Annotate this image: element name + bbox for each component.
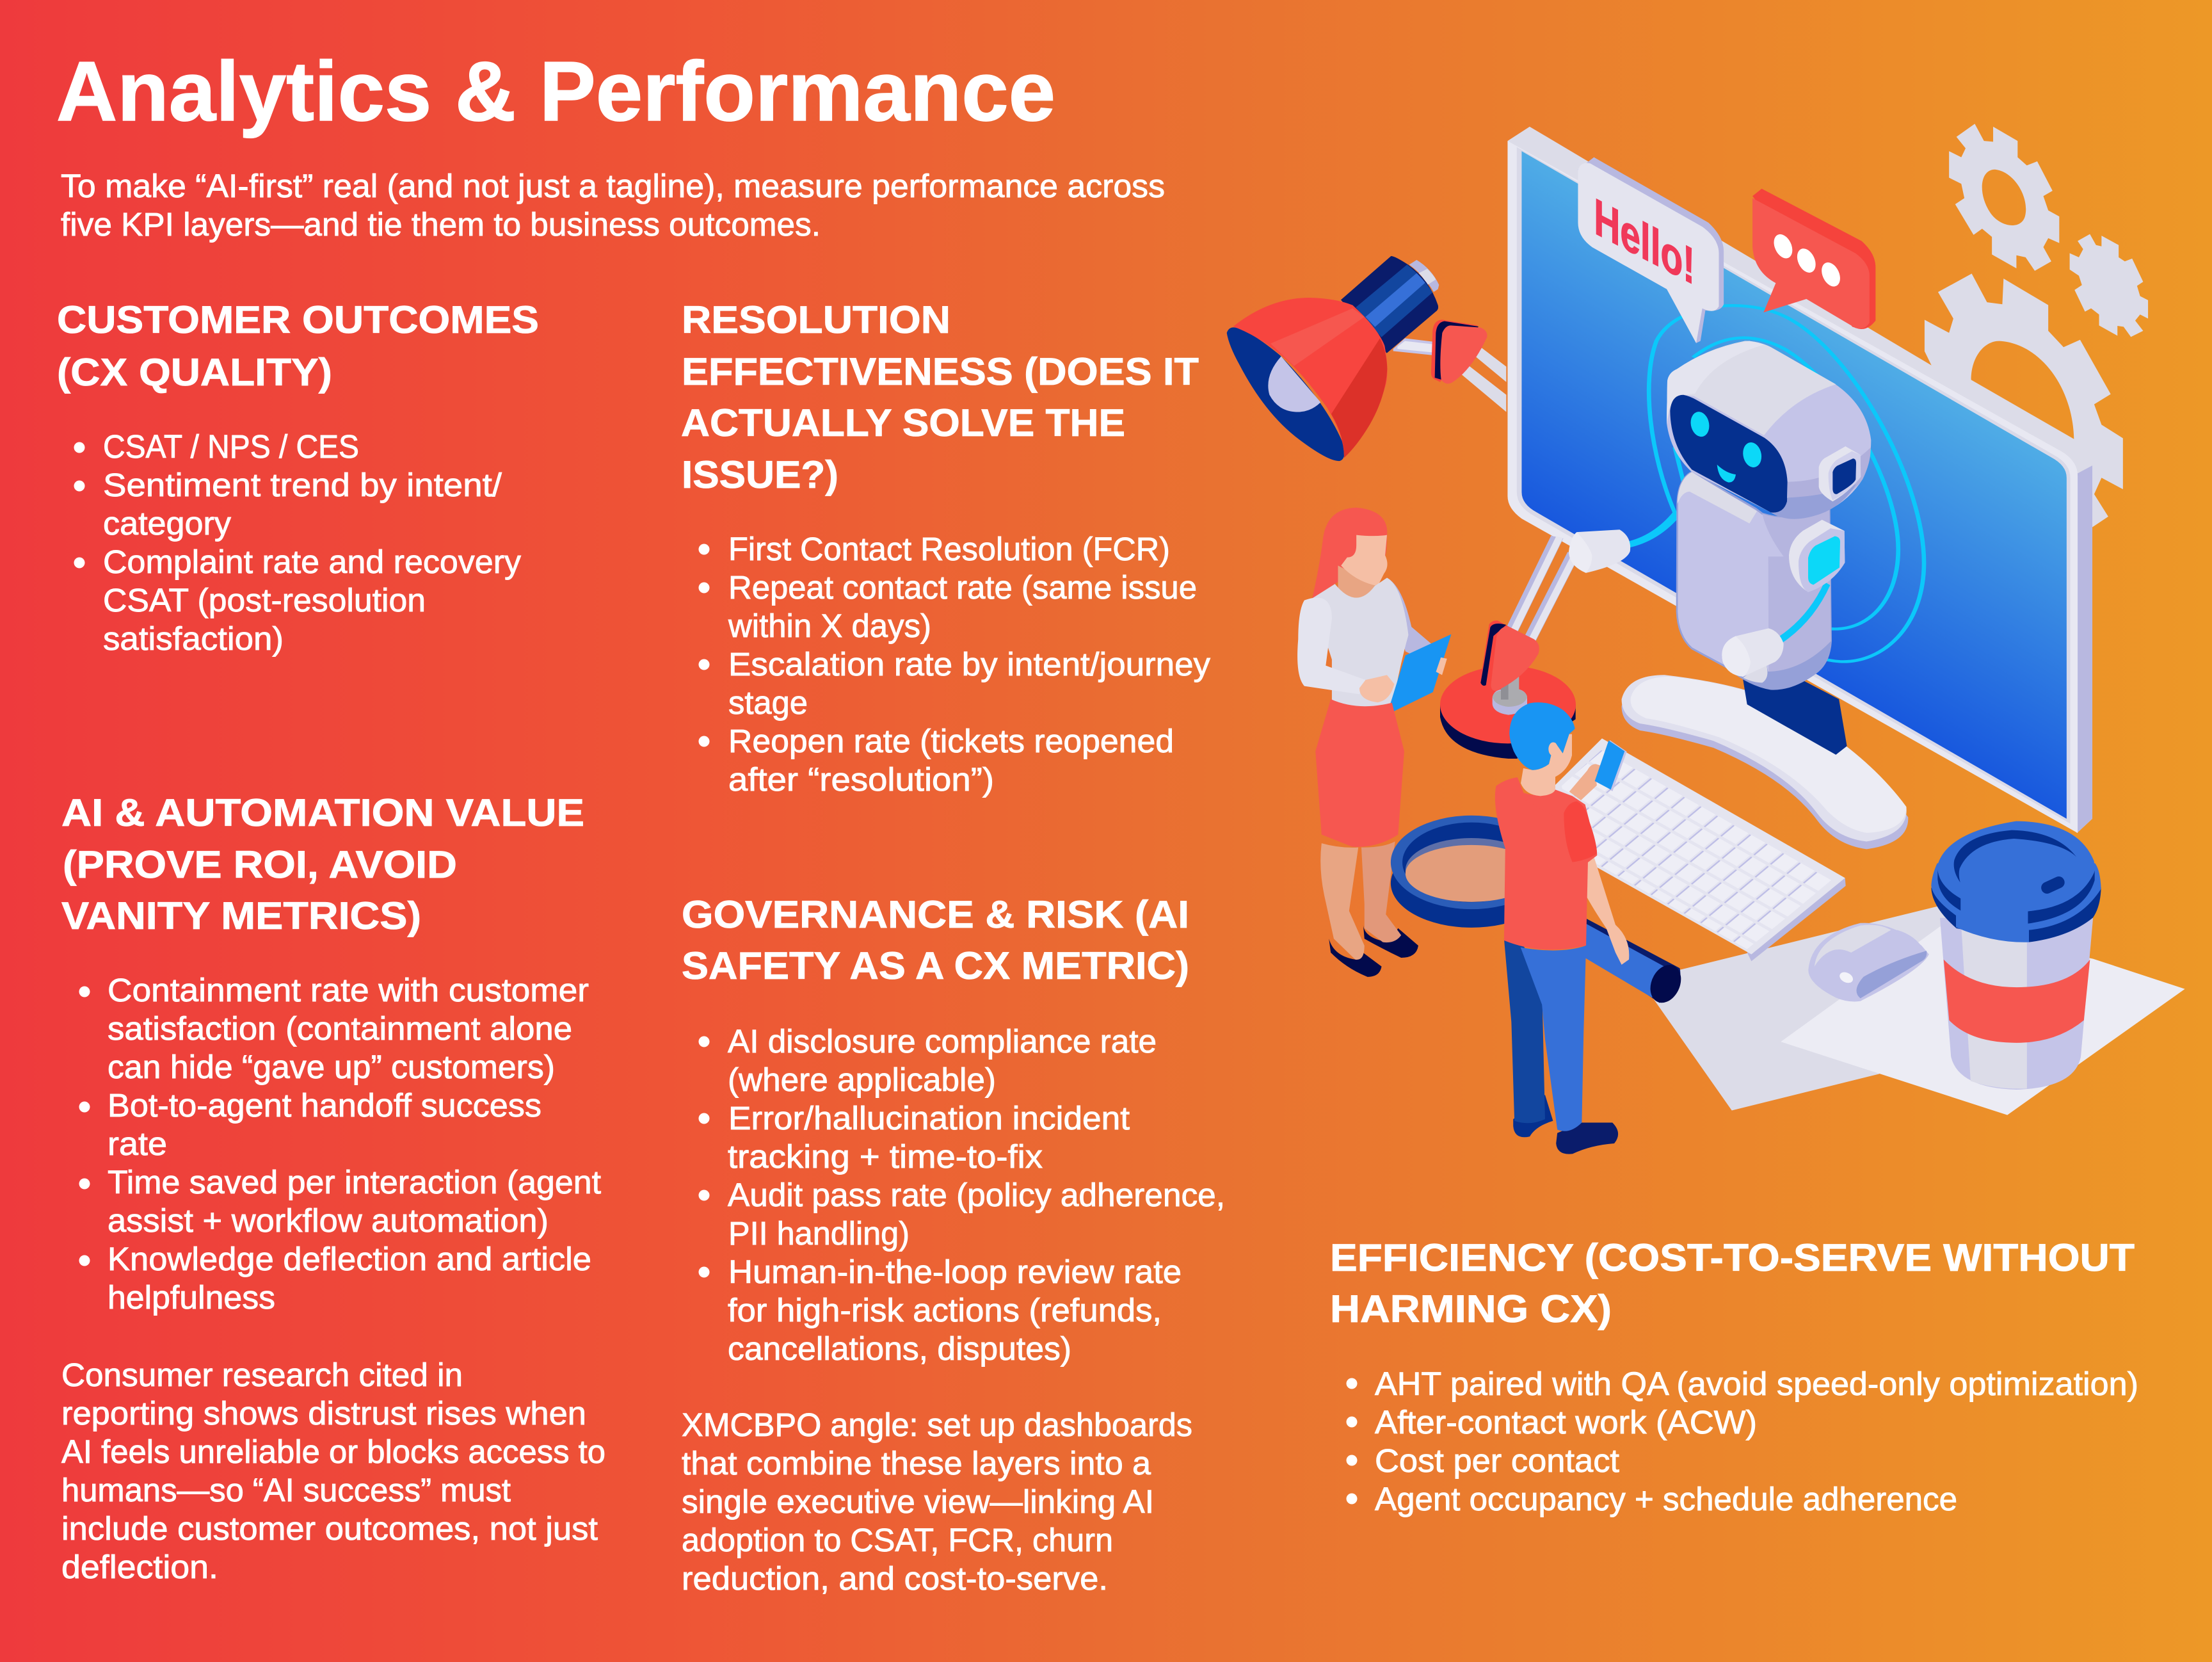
robot shoulder [1789, 520, 1845, 592]
text block: consumer research: reporting shows distrust rises when [61, 1395, 586, 1432]
list: efficiency: Cost per contact [1375, 1442, 1619, 1479]
list: AI and automation value: helpfulness [108, 1279, 275, 1316]
list: AI and automation value: Knowledge deflection and article [108, 1241, 591, 1277]
list: resolution effectiveness [699, 531, 1211, 798]
list: customer outcomes: satisfaction) [103, 620, 284, 657]
text block: consumer research: Consumer research cited in [61, 1357, 463, 1393]
robot [1667, 341, 1871, 689]
heading: governance and risk [682, 893, 1189, 987]
list: AI and automation value: Containment rate with customer [108, 972, 589, 1008]
list: governance and risk: Error/hallucination incident [728, 1100, 1130, 1136]
lamp base [1440, 620, 1576, 759]
list: AI and automation value: Time saved per interaction (agent [108, 1164, 601, 1200]
text block: consumer research: deflection. [61, 1549, 218, 1585]
icon: medium gear [1949, 124, 2059, 271]
list: customer outcomes: CSAT / NPS / CES [103, 428, 359, 465]
panel: AI and automation value [61, 791, 605, 1585]
list: governance and risk: Audit pass rate (policy adherence, [728, 1177, 1225, 1213]
icon: large gear [1925, 273, 2123, 528]
person: man with phone [1495, 702, 1629, 1154]
text block: XMCBPO angle: XMCBPO angle: set up dashboards [682, 1407, 1192, 1443]
text block: XMCBPO angle: single executive view—linking AI [682, 1483, 1154, 1520]
intro text: five KPI layers—and tie them to business outcomes. [61, 206, 821, 243]
heading: governance and risk: SAFETY AS A CX METRIC) [682, 944, 1189, 987]
heading: resolution effectiveness [681, 298, 1199, 496]
text block: XMCBPO angle: adoption to CSAT, FCR, churn [682, 1522, 1113, 1558]
woman skirt and legs [1315, 699, 1418, 977]
list: AI and automation value: Bot-to-agent handoff success [108, 1087, 541, 1124]
desk lamp head and arms [1227, 256, 1506, 461]
illustration back layer [1925, 124, 2148, 528]
signal rings [1626, 305, 1924, 661]
panel: resolution effectiveness [681, 298, 1211, 798]
text block: XMCBPO angle [682, 1407, 1192, 1597]
list: resolution effectiveness: Repeat contact rate (same issue [728, 569, 1197, 606]
person: woman with tablet [1297, 508, 1451, 977]
heading: governance and risk: GOVERNANCE & RISK (AI [682, 893, 1189, 936]
papers on desk [1640, 906, 2185, 1115]
list: AI and automation value: can hide “gave up” customers) [108, 1049, 555, 1085]
text block: consumer research: AI feels unreliable or blocks access to [61, 1433, 605, 1470]
heading: resolution effectiveness: RESOLUTION [682, 298, 950, 341]
list: efficiency: AHT paired with QA (avoid speed-only optimization) [1375, 1366, 2138, 1402]
list: governance and risk: AI disclosure compliance rate [728, 1023, 1157, 1060]
robot right hand [1743, 666, 1767, 682]
list: governance and risk: for high-risk actions (refunds, [728, 1292, 1162, 1328]
heading: customer outcomes: (CX QUALITY) [57, 351, 332, 394]
icon: small gear [2070, 234, 2148, 337]
panel: customer outcomes [57, 298, 539, 657]
list: AI and automation value [79, 972, 601, 1316]
list: governance and risk: (where applicable) [728, 1061, 996, 1098]
lamp arm rods [1475, 348, 1506, 382]
robot head [1667, 341, 1871, 519]
title: Analytics & Performance [56, 44, 1055, 138]
speech bubble: Hello [1578, 157, 1724, 343]
text block: consumer research [61, 1357, 605, 1585]
heading: AI and automation value: AI & AUTOMATION VALUE [61, 791, 584, 834]
list: resolution effectiveness: after “resolution”) [728, 761, 994, 798]
heading: efficiency: HARMING CX) [1330, 1287, 1612, 1330]
heading: customer outcomes: CUSTOMER OUTCOMES [57, 298, 539, 341]
list: customer outcomes: CSAT (post-resolution [103, 582, 426, 618]
heading: resolution effectiveness: ACTUALLY SOLVE THE [681, 401, 1125, 444]
lower lamp arm rods [1509, 537, 1576, 643]
lamp shade [1227, 327, 1345, 461]
mouse [1808, 923, 1929, 1001]
list: governance and risk [699, 1023, 1225, 1367]
speech bubble: Hello: Hello! [1594, 188, 1695, 296]
text block: XMCBPO angle: reduction, and cost-to-serve. [682, 1560, 1108, 1597]
heading: customer outcomes [57, 298, 539, 394]
heading: efficiency [1330, 1236, 2135, 1330]
coffee cup body [1940, 918, 2093, 1090]
list: AI and automation value: rate [108, 1125, 167, 1162]
list: efficiency: Agent occupancy + schedule adherence [1375, 1481, 1957, 1517]
list: customer outcomes: Sentiment trend by intent/ [103, 467, 502, 503]
woman upper body [1297, 508, 1451, 714]
heading: resolution effectiveness: EFFECTIVENESS (DOES IT [682, 350, 1199, 393]
list: governance and risk: Human-in-the-loop review rate [728, 1254, 1182, 1290]
coffee cup lid [1931, 821, 2101, 942]
lamp joint [1431, 319, 1477, 382]
list: governance and risk: tracking + time-to-fix [728, 1138, 1043, 1175]
list: resolution effectiveness: stage [728, 684, 808, 721]
monitor [1507, 127, 2092, 833]
list: resolution effectiveness: Reopen rate (tickets reopened [728, 723, 1174, 759]
list: efficiency [1347, 1366, 2138, 1517]
robot face [1670, 395, 1788, 513]
intro text [61, 168, 1165, 243]
list: AI and automation value: satisfaction (containment alone [108, 1010, 572, 1047]
man head, phone and sleeve [1509, 702, 1627, 862]
panel: governance and risk [682, 893, 1225, 1597]
robot arm [1781, 583, 1827, 640]
heading: AI and automation value: VANITY METRICS) [61, 894, 421, 937]
robot ear [1819, 446, 1861, 501]
list: customer outcomes: category [103, 505, 232, 542]
monitor stand and base [1622, 675, 1908, 849]
heading: AI and automation value [61, 791, 584, 937]
text block: XMCBPO angle: that combine these layers into a [682, 1445, 1151, 1481]
list: resolution effectiveness: Escalation rate by intent/journey [728, 646, 1211, 682]
list: customer outcomes: Complaint rate and recovery [103, 544, 522, 580]
list: customer outcomes [74, 428, 522, 657]
panel: efficiency [1330, 1236, 2138, 1517]
list: resolution effectiveness: within X days) [728, 608, 931, 644]
heading: resolution effectiveness: ISSUE?) [682, 453, 838, 496]
man lower body and torso [1495, 777, 1629, 1154]
keyboard [1554, 738, 1846, 961]
magnifier and its handle [1391, 816, 1685, 1004]
list: efficiency: After-contact work (ACW) [1375, 1404, 1757, 1440]
text block: consumer research: include customer outcomes, not just [61, 1510, 598, 1547]
speech bubble: typing dots [1752, 189, 1875, 329]
robot left hand [1569, 529, 1630, 573]
lamp neck [1409, 260, 1439, 292]
illustration: robot at monitor with two people [1227, 124, 2185, 1154]
heading: AI and automation value: (PROVE ROI, AVOID [63, 843, 457, 886]
list: resolution effectiveness: First Contact Resolution (FCR) [728, 531, 1170, 567]
heading: efficiency: EFFICIENCY (COST-TO-SERVE WITHOUT [1330, 1236, 2135, 1279]
text block: consumer research: humans—so “AI success” must [61, 1472, 511, 1508]
list: governance and risk: cancellations, disputes) [728, 1330, 1071, 1367]
intro text: To make “AI-first” real (and not just a tagline), measure performance across [61, 168, 1165, 204]
robot body [1677, 472, 1831, 689]
list: AI and automation value: assist + workflow automation) [108, 1202, 549, 1239]
list: governance and risk: PII handling) [728, 1215, 910, 1252]
robot left hand and speech bubbles [1569, 157, 1875, 573]
keyboard, mouse, coffee cup body [1554, 738, 2093, 1090]
